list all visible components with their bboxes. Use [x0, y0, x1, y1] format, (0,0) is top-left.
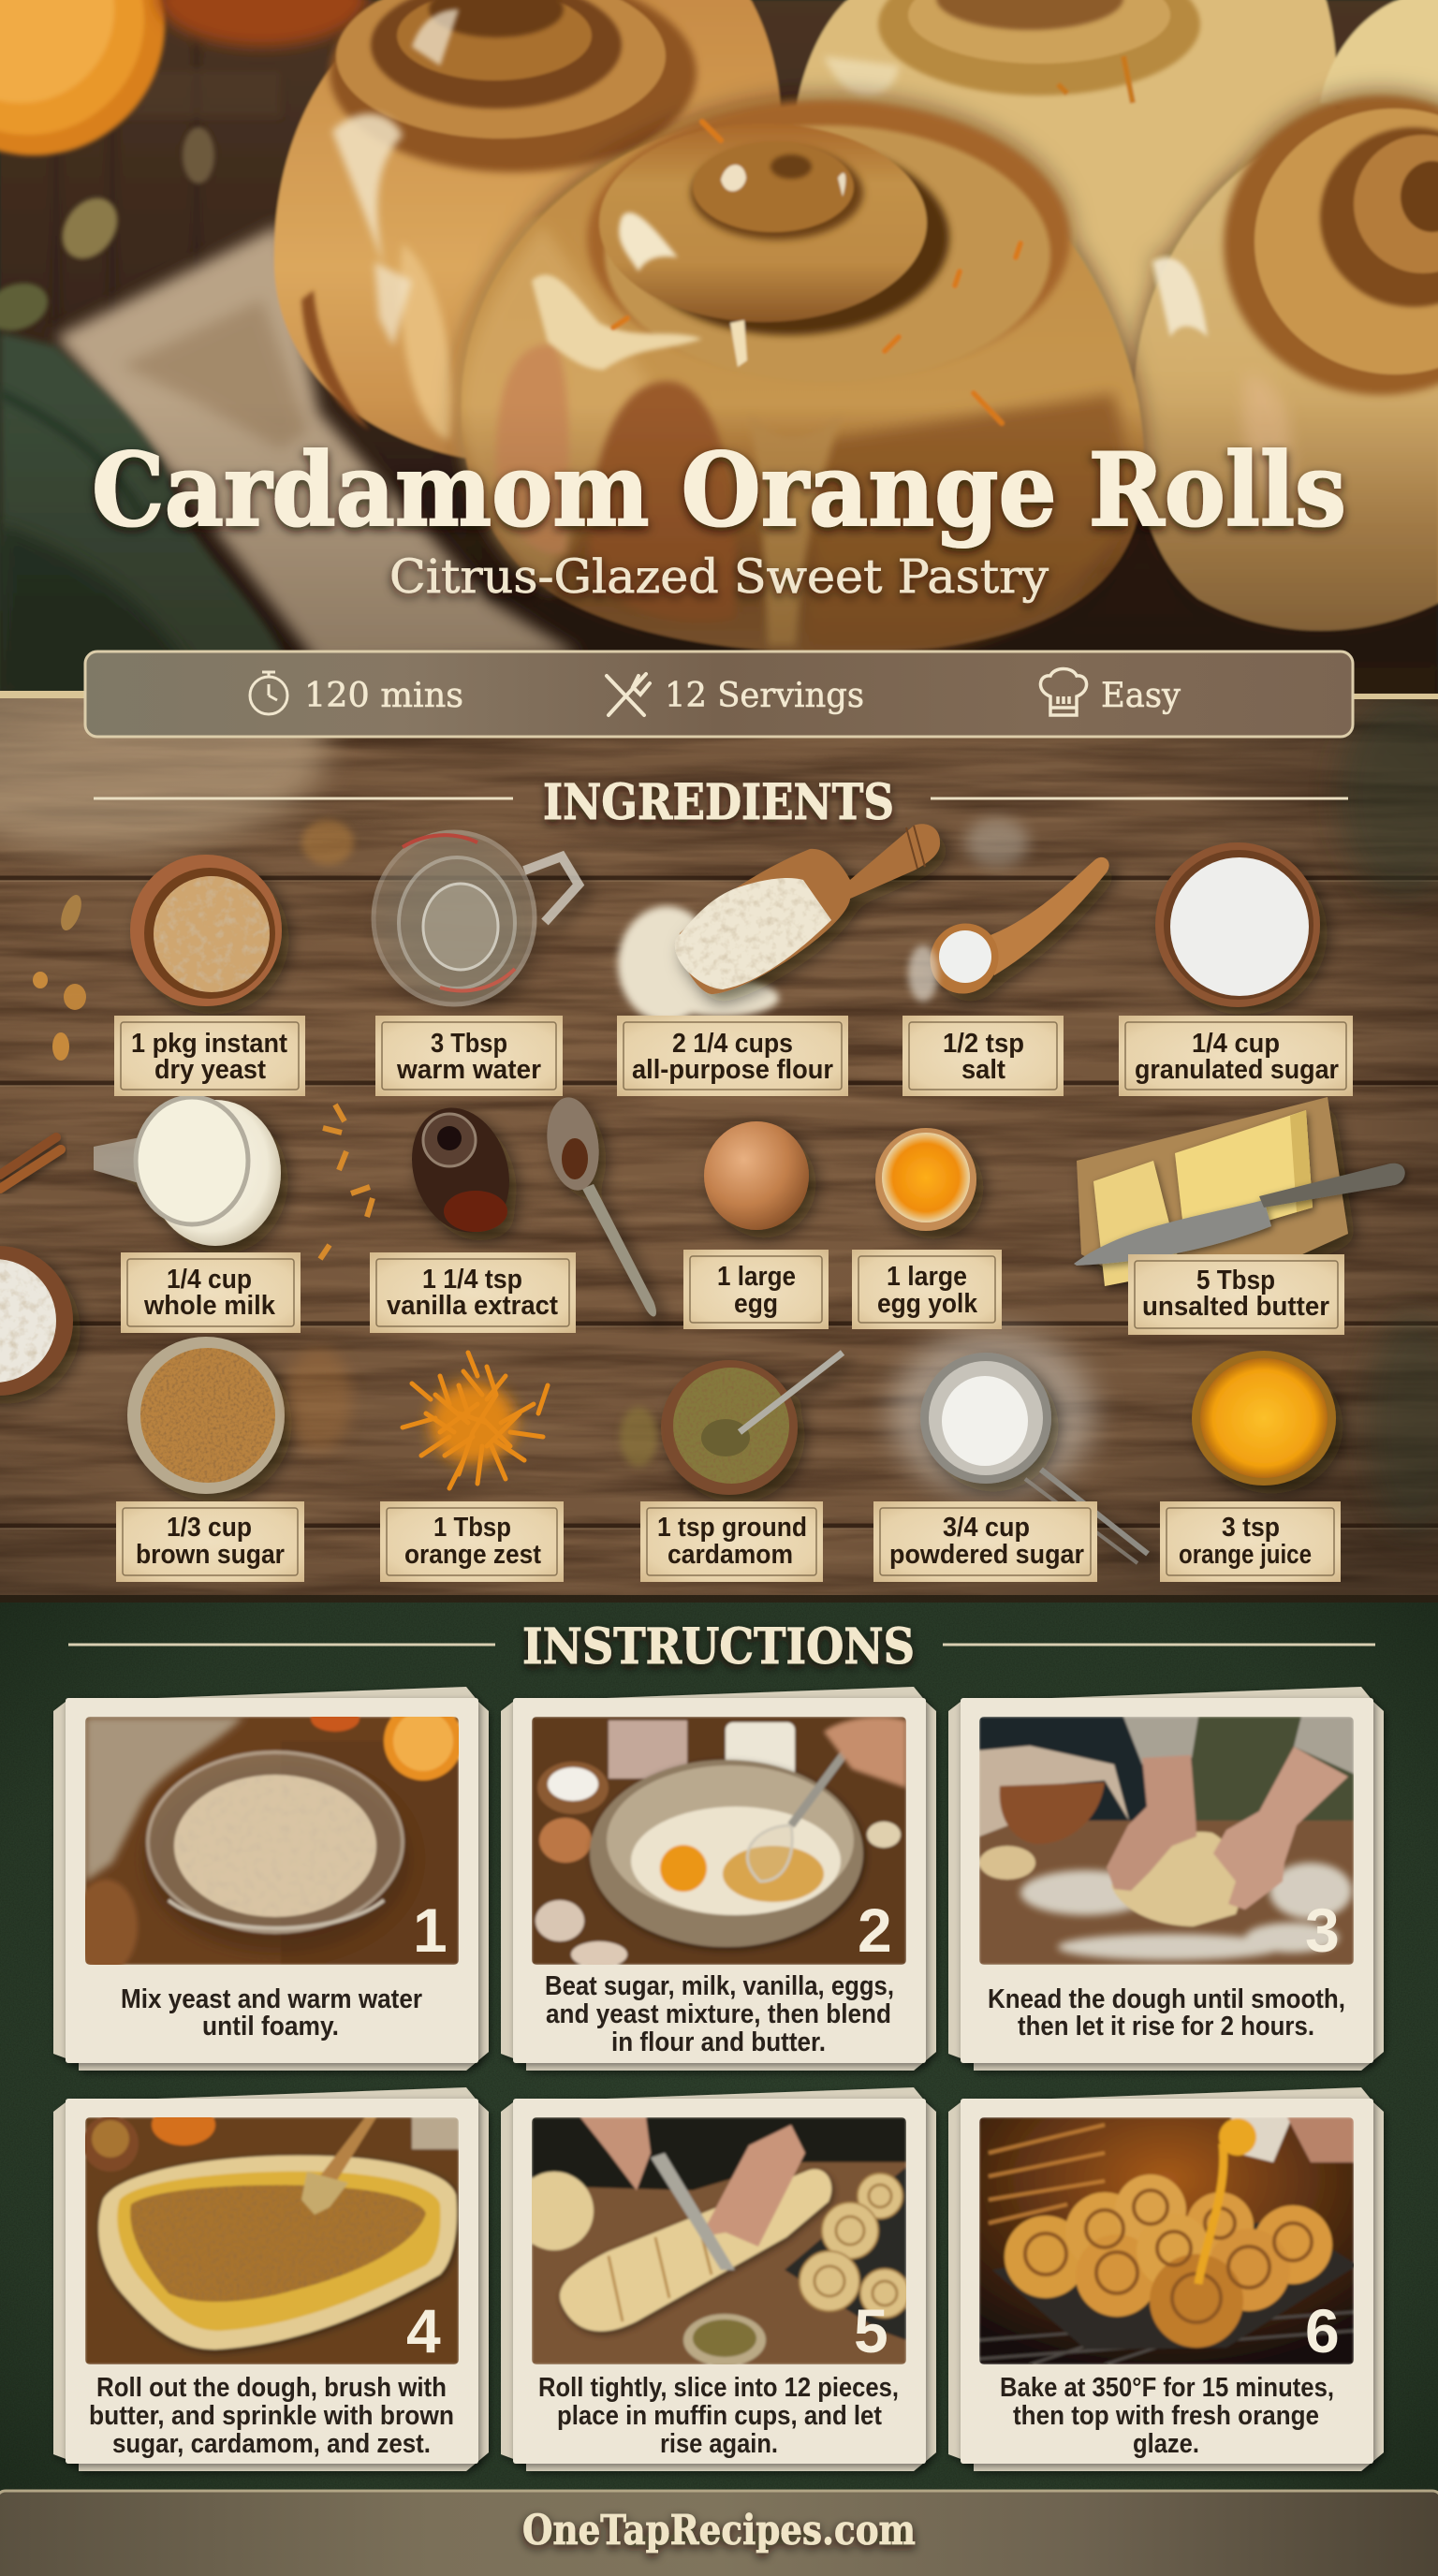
green cloth	[0, 332, 301, 697]
label: cardamom: cardamom	[668, 1540, 793, 1570]
step number 4: 4	[406, 2296, 441, 2365]
step text 4: sugar, cardamom, and zest.	[112, 2429, 431, 2459]
label: orange juice: 3 tsp	[1222, 1513, 1280, 1543]
label: salt: 1/2 tsp	[943, 1029, 1024, 1059]
photo: slicing rolls	[515, 2117, 909, 2366]
photo: filling rolled dough	[82, 2104, 459, 2364]
step number 5: 5	[854, 2296, 888, 2365]
icon: chef hat	[1040, 668, 1087, 715]
step text 1	[121, 1984, 422, 2042]
label: salt	[902, 1016, 1064, 1096]
label: orange juice: orange juice	[1179, 1540, 1312, 1570]
step text 6	[1000, 2373, 1334, 2459]
label: vanilla: vanilla extract	[387, 1291, 558, 1321]
right roll	[1134, 95, 1438, 631]
label: flour: all-purpose flour	[632, 1055, 833, 1085]
label: milk	[121, 1252, 301, 1333]
ingredient: yeast bowl	[130, 855, 282, 1006]
label: salt: salt	[961, 1055, 1005, 1085]
glaze highlights	[619, 212, 678, 271]
ingredient: vanilla spoon	[541, 1094, 656, 1316]
ingredient: cinnamon sticks	[0, 1137, 61, 1189]
step text 4: Roll out the dough, brush with	[96, 2373, 447, 2403]
heading: ingredients: INGREDIENTS	[543, 774, 894, 831]
label: egg: 1 large	[717, 1262, 796, 1292]
label: milk: whole milk	[143, 1291, 276, 1321]
label: egg yolk: 1 large	[887, 1262, 967, 1292]
step text 5: place in muffin cups, and let	[557, 2401, 882, 2431]
step text 2: in flour and butter.	[611, 2027, 826, 2057]
label: egg yolk	[852, 1250, 1002, 1329]
scattered crumbs	[33, 820, 373, 1259]
label: granulated sugar	[1119, 1016, 1353, 1096]
photo: kneading dough	[979, 1717, 1354, 1965]
label: brown sugar	[116, 1501, 304, 1582]
step text 1: until foamy.	[202, 2012, 339, 2042]
step card 1	[53, 1687, 489, 2071]
icon: whole orange	[157, 0, 367, 47]
step number 2: 2	[858, 1895, 892, 1965]
label: butter: unsalted butter	[1142, 1292, 1329, 1322]
step number 1: 1	[413, 1895, 448, 1965]
ingredient labels	[114, 1016, 1353, 1582]
label: granulated sugar: 1/4 cup	[1192, 1029, 1280, 1059]
back right roll	[1320, 0, 1438, 122]
step number 3: 3	[1305, 1895, 1340, 1965]
step text 4: butter, and sprinkle with brown	[89, 2401, 454, 2431]
step card 2	[501, 1687, 936, 2071]
glaze drips	[496, 344, 568, 554]
step text 6: Bake at 350°F for 15 minutes,	[1000, 2373, 1334, 2403]
section: instructions green background	[0, 1595, 1438, 2576]
ingredient: butter on paper with knife	[1074, 1097, 1405, 1286]
label: brown sugar: brown sugar	[136, 1540, 285, 1570]
label: vanilla: 1 1/4 tsp	[422, 1265, 522, 1295]
label: vanilla	[370, 1252, 576, 1333]
title: Cardamom Orange Rolls	[92, 432, 1346, 549]
step text 6: glaze.	[1133, 2429, 1199, 2459]
parchment paper	[56, 225, 580, 665]
ingredient: warm water cup	[374, 832, 579, 1004]
section: ingredients wood board	[0, 646, 1438, 1599]
label: granulated sugar: granulated sugar	[1135, 1055, 1339, 1085]
photo: yeast in glass bowl	[74, 1702, 462, 1973]
step text 3: then let it rise for 2 hours.	[1018, 2012, 1314, 2042]
shading under title	[0, 402, 1438, 698]
label: milk: 1/4 cup	[167, 1265, 252, 1295]
back centre roll	[794, 0, 1337, 393]
footer bar: OneTapRecipes.com	[522, 2507, 916, 2554]
label: powdered sugar	[873, 1501, 1097, 1582]
step number 6: 6	[1305, 2296, 1340, 2365]
photo: glazing rolls in oven	[979, 2117, 1357, 2364]
ingredient: sugar bowl	[1155, 842, 1320, 1007]
swirl	[587, 100, 1070, 377]
icon: orange slice	[0, 0, 165, 155]
ingredient: orange zest	[403, 1353, 548, 1488]
photo: beating batter in bowl	[532, 1717, 906, 1968]
step text 5: Roll tightly, slice into 12 pieces,	[538, 2373, 899, 2403]
label: yeast	[114, 1016, 305, 1096]
stat: time: 120 mins	[304, 677, 463, 715]
label: cardamom: 1 tsp ground	[657, 1513, 807, 1543]
back left roll	[274, 0, 782, 459]
ingredient: egg	[704, 1121, 809, 1230]
label: egg yolk: egg yolk	[877, 1289, 978, 1319]
ingredient: vanilla bottle	[396, 1095, 525, 1245]
ingredient: whole milk jug	[94, 1097, 281, 1246]
step text 5: rise again.	[660, 2429, 778, 2459]
step text 2	[545, 1971, 894, 2057]
ingredient: egg yolk	[875, 1128, 976, 1231]
label: zest	[380, 1501, 564, 1582]
label: yeast: dry yeast	[154, 1055, 266, 1085]
main roll	[462, 100, 1144, 652]
label: egg	[683, 1250, 829, 1329]
section: hero photo of rolls	[0, 0, 1438, 698]
ingredient: flour scoop	[618, 824, 940, 1022]
label: butter	[1128, 1254, 1344, 1335]
stat: servings: 12 Servings	[665, 677, 864, 715]
ingredient: salt spoon	[917, 857, 1109, 1006]
ingredient: orange juice	[1192, 1351, 1336, 1486]
label: egg: egg	[734, 1289, 778, 1319]
ingredient: flour bowl at left edge	[0, 1246, 73, 1396]
label: powdered sugar: powdered sugar	[889, 1540, 1084, 1570]
label: butter: 5 Tbsp	[1196, 1266, 1275, 1295]
label: zest: orange zest	[404, 1540, 541, 1570]
ingredient: cardamom bowl	[661, 1353, 843, 1495]
label: yeast: 1 pkg instant	[131, 1029, 287, 1059]
step text 2: Beat sugar, milk, vanilla, eggs,	[545, 1971, 894, 2001]
ingredient: brown sugar bowl	[127, 1337, 285, 1494]
footer bar	[0, 2491, 1438, 2576]
step text 2: and yeast mixture, then blend	[546, 1999, 891, 2029]
label: orange juice	[1160, 1501, 1341, 1582]
step text 6: then top with fresh orange	[1013, 2401, 1319, 2431]
stat: difficulty: Easy	[1101, 677, 1181, 715]
icon: fork and knife	[607, 674, 650, 715]
label: powdered sugar: 3/4 cup	[943, 1513, 1030, 1543]
label: brown sugar: 1/3 cup	[167, 1513, 252, 1543]
step text 3	[988, 1984, 1345, 2042]
step text 1: Mix yeast and warm water	[121, 1984, 422, 2014]
label: water: 3 Tbsp	[431, 1029, 507, 1059]
step card 4	[53, 2087, 489, 2471]
subtitle: Citrus-Glazed Sweet Pastry	[389, 549, 1049, 604]
label: water: warm water	[396, 1055, 541, 1085]
label: flour	[617, 1016, 848, 1096]
label: cardamom	[640, 1501, 823, 1582]
step text 5	[538, 2373, 899, 2459]
stats bar	[85, 651, 1353, 737]
step text 3: Knead the dough until smooth,	[988, 1984, 1345, 2014]
wood top edge strip	[0, 691, 1438, 699]
wood table behind rolls	[137, 43, 275, 112]
heading: instructions: INSTRUCTIONS	[522, 1618, 915, 1676]
step card 6	[948, 2087, 1384, 2471]
icon: cardamom pods	[0, 127, 214, 339]
step card 5	[501, 2087, 936, 2471]
step text 4	[89, 2373, 454, 2459]
label: zest: 1 Tbsp	[433, 1513, 511, 1543]
label: flour: 2 1/4 cups	[672, 1029, 793, 1059]
icon: stopwatch	[250, 672, 287, 714]
ingredient: powdered sugar sifter	[889, 1329, 1148, 1563]
label: water	[375, 1016, 563, 1096]
step card 3	[948, 1687, 1384, 2071]
